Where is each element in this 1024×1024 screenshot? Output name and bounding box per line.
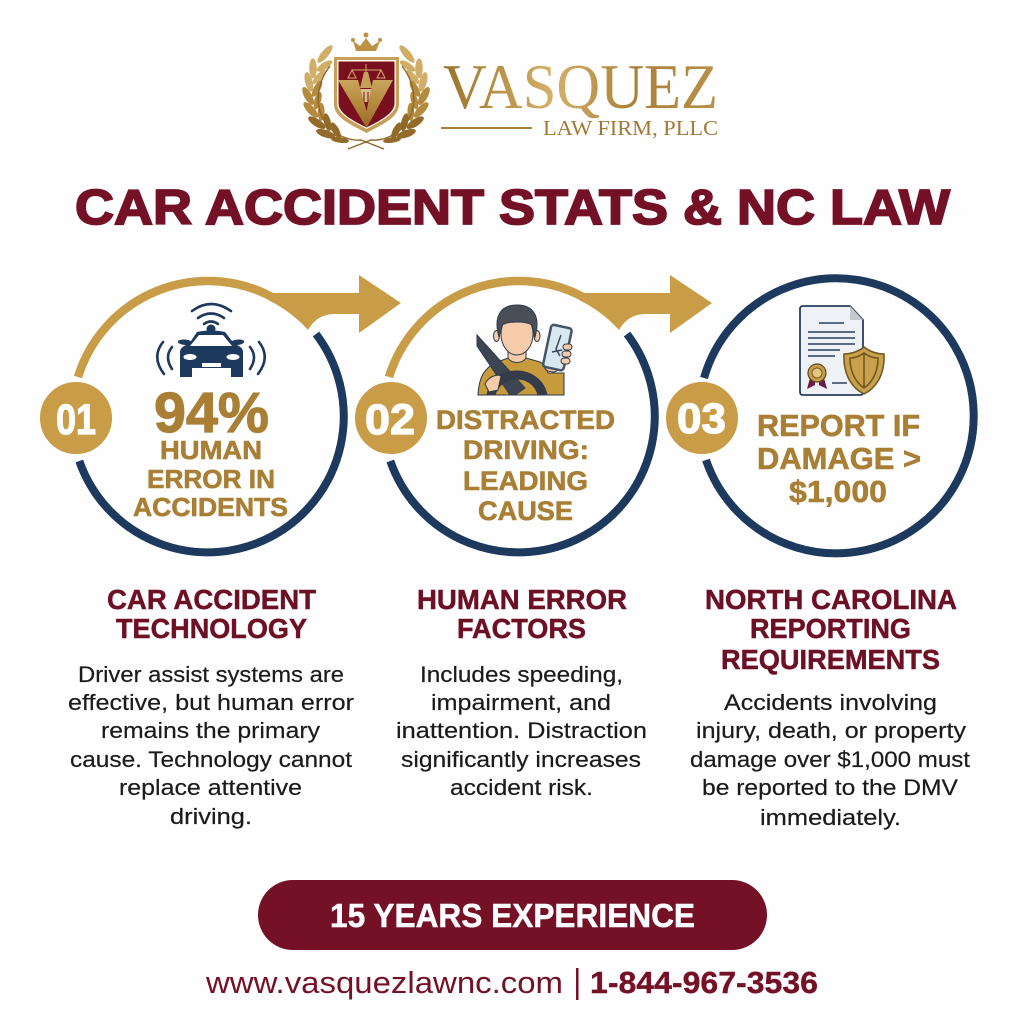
body text: injury, death, or property bbox=[696, 718, 967, 743]
logo wordmark: LAW FIRM, PLLC bbox=[543, 116, 718, 140]
footer contact line: 1-844-967-3536 bbox=[590, 965, 818, 1000]
heading: north carolina reporting requirements: REPORTING bbox=[750, 613, 911, 644]
badge 01: 01 bbox=[56, 396, 96, 444]
badge 03: 03 bbox=[677, 395, 726, 443]
navy ring bbox=[704, 278, 974, 553]
heading: human error factors: FACTORS bbox=[457, 613, 586, 644]
navy ring arc bbox=[79, 334, 344, 552]
logo bbox=[300, 32, 718, 149]
icon: distracted driver bbox=[477, 305, 572, 395]
text: distracted driving leading cause bbox=[436, 405, 615, 526]
heading: human error factors: HUMAN ERROR bbox=[417, 584, 627, 615]
panel: step 1 circle bbox=[39, 275, 401, 552]
text: distracted driving leading cause: LEADING bbox=[463, 466, 588, 496]
stat: 94% human error in accidents: ACCIDENTS bbox=[133, 494, 288, 522]
experience pill: 15 YEARS EXPERIENCE bbox=[330, 897, 695, 934]
badge 02: 02 bbox=[365, 396, 415, 444]
panel: step 3 circle bbox=[665, 278, 974, 553]
heading: north carolina reporting requirements: NORTH CAROLINA bbox=[705, 584, 957, 615]
body text bbox=[68, 662, 355, 829]
text: distracted driving leading cause: DISTRACTED bbox=[436, 405, 615, 435]
footer contact line: www.vasquezlawnc.com bbox=[205, 965, 563, 1000]
navy ring arc bbox=[390, 334, 655, 552]
body text: inattention. Distraction bbox=[396, 718, 647, 743]
text column 2 bbox=[396, 584, 647, 800]
badge 02 bbox=[354, 381, 428, 455]
stat: 94% human error in accidents: ERROR IN bbox=[147, 466, 275, 494]
heading: car accident technology: CAR ACCIDENT bbox=[107, 584, 316, 615]
body text bbox=[690, 690, 971, 830]
gold ring arc with arrow bbox=[78, 275, 401, 377]
body text: accident risk. bbox=[450, 775, 593, 800]
text: report if damage over $1,000 bbox=[757, 408, 921, 509]
body text: driving. bbox=[170, 804, 252, 829]
heading: car accident technology bbox=[107, 584, 316, 644]
heading: north carolina reporting requirements bbox=[705, 584, 957, 675]
icon: laurel wreath left bbox=[300, 43, 384, 149]
body text: remains the primary bbox=[101, 718, 321, 743]
icon: shield bbox=[334, 57, 399, 133]
body text: Accidents involving bbox=[724, 690, 937, 715]
heading: car accident technology: TECHNOLOGY bbox=[116, 613, 307, 644]
body text: impairment, and bbox=[431, 690, 611, 715]
body text: effective, but human error bbox=[68, 690, 355, 715]
heading: north carolina reporting requirements: REQUIREMENTS bbox=[721, 644, 940, 675]
text column 3 bbox=[690, 584, 971, 830]
body text: cause. Technology cannot bbox=[70, 747, 353, 772]
heading: human error factors bbox=[417, 584, 627, 644]
icon: laurel wreath right bbox=[348, 43, 432, 149]
stat: 94% human error in accidents: 94% bbox=[154, 381, 269, 445]
body text: Includes speeding, bbox=[420, 662, 623, 687]
body text: significantly increases bbox=[401, 747, 641, 772]
body text: damage over $1,000 must bbox=[690, 747, 971, 772]
footer contact line bbox=[205, 965, 818, 1000]
body text: immediately. bbox=[760, 805, 901, 830]
body text bbox=[396, 662, 647, 800]
icon: crown bbox=[351, 32, 382, 51]
title: CAR ACCIDENT STATS & NC LAW bbox=[75, 181, 951, 235]
text column 1 bbox=[68, 584, 355, 829]
stat: 94% human error in accidents bbox=[133, 381, 288, 522]
icon: connected car bbox=[157, 304, 265, 377]
stat: 94% human error in accidents: HUMAN bbox=[160, 437, 262, 465]
text: report if damage over $1,000: REPORT IF bbox=[757, 408, 920, 443]
body text: replace attentive bbox=[119, 775, 302, 800]
body text: Driver assist systems are bbox=[78, 662, 344, 687]
logo wordmark: VASQUEZ bbox=[443, 52, 718, 122]
panel: step 2 circle bbox=[354, 275, 712, 552]
icon: document and shield bbox=[800, 306, 884, 395]
body text: be reported to the DMV bbox=[702, 775, 958, 800]
text: report if damage over $1,000: DAMAGE > bbox=[757, 441, 921, 476]
experience pill bbox=[258, 880, 767, 950]
gold ring arc with arrow bbox=[389, 275, 712, 377]
text: distracted driving leading cause: CAUSE bbox=[478, 496, 573, 526]
text: distracted driving leading cause: DRIVING: bbox=[463, 435, 589, 465]
badge 01 bbox=[39, 381, 113, 455]
text: report if damage over $1,000: $1,000 bbox=[789, 474, 887, 509]
badge 03 bbox=[665, 381, 739, 455]
